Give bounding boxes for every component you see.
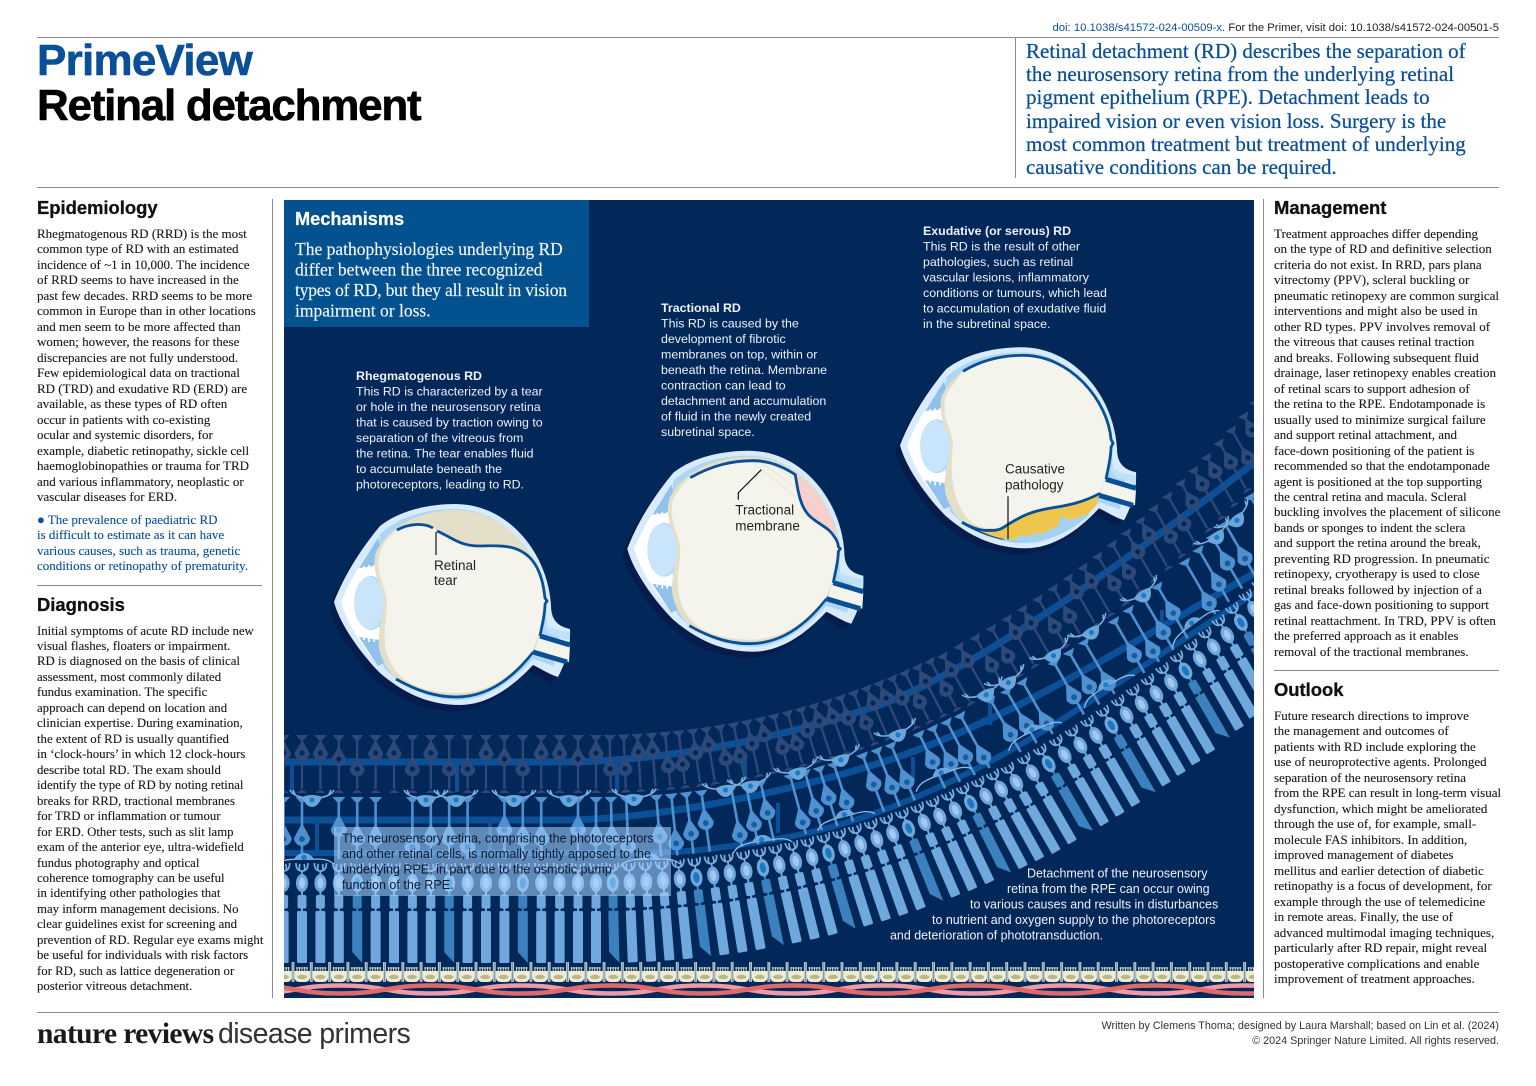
text: management body: usually used to minimize surgical failure [1274,412,1486,427]
label: tractional membrane: membrane [735,519,800,534]
text: epidemiology body: Few epidemiological data on tractional [37,365,240,380]
yellow exudative fluid [976,493,1100,541]
text: rhegmatogenous RD: that is caused by traction owing to [356,416,543,430]
text: diagnosis body: in identifying other pathologies that [37,886,220,900]
heading: Management: Management [1274,197,1386,218]
text: exudative RD: vascular lesions, inflammatory [923,270,1090,284]
label: retinal tear: Retinal [434,558,476,573]
text: outlook body: through the use of, for example, small- [1274,816,1476,831]
text: management body: preventing RD progression. In pneumatic [1274,551,1490,566]
title: PrimeView [37,36,252,85]
text: diagnosis body: visual flashes, floaters or impairment. [37,639,230,653]
eye: exudative RD [895,347,1136,554]
text: epidemiology body: ocular and systemic disorders, for [37,427,213,442]
callout: neurosensory retina [334,827,671,896]
text: epidemiology body [36,226,256,504]
text: outlook body: mellitus and earlier detection of diabetic [1274,863,1484,878]
text: diagnosis body: clear guidelines exist for screening and [37,917,237,931]
text: rhegmatogenous RD: or hole in the neurosensory retina [356,400,541,414]
text: tractional RD: development of fibrotic [661,332,786,346]
doi reference line: doi: 10.1038/s41572-024-00509-x. For the Primer, visit doi: 10.1038/s41572-024-00501-5 [1052,22,1499,34]
eye: tractional RD [622,451,863,658]
text: exudative RD: This RD is the result of other [923,240,1080,254]
text: mechanisms intro: impairment or loss. [295,300,431,320]
intro text: most common treatment but treatment of underlying [1026,132,1466,156]
text: rhegmatogenous RD: to accumulate beneath the [356,462,502,476]
text: outlook body: advanced multimodal imaging techniques, [1274,925,1494,940]
text: management body: and support retinal attachment, and [1274,427,1457,442]
text: management body: the retina to the RPE. Endotamponade is [1274,396,1485,411]
text: diagnosis body: in ‘clock-hours’ in which 12 clock-hours [37,747,245,761]
callout: neurosensory retina: The neurosensory retina, comprising the photoreceptors [342,832,654,846]
heading: Outlook: Outlook [1274,679,1343,700]
text: epidemiology body: common in Europe than in other locations [37,303,256,318]
text: epidemiology body: discrepancies are not fully understood. [37,350,238,365]
callout line: retinal tear [435,532,437,555]
text: management body: criteria do not exist. In RRD, pars plana [1274,257,1482,272]
horizontal cells [274,498,1258,867]
text: exudative RD: Exudative (or serous) RD [923,224,1071,238]
text: diagnosis body: Initial symptoms of acute RD include new [37,624,254,638]
label: causative pathology: Causative [1005,461,1065,476]
text: outlook body: particularly after RD repair, might reveal [1274,940,1487,955]
photoreceptor, bipolar and ganglion cells: flat section [276,735,604,963]
text: rhegmatogenous RD: separation of the vitreous from [356,431,523,445]
neural layer bands [284,458,1260,853]
photoreceptor, bipolar and ganglion cells: curved detached section [602,396,1376,963]
text: epidemiology body: Rhegmatogenous RD (RRD) is the most [37,226,247,241]
text: management body [1274,226,1500,659]
text: management body: the preferred approach as it enables [1274,628,1458,643]
text: epidemiology body: and men seem to be more affected than [37,319,241,334]
text: diagnosis body: fundus photography and optical [37,856,199,870]
text: tractional RD: detachment and accumulation [661,394,826,408]
text: management body: other RD types. PPV involves removal of [1274,319,1490,334]
text: diagnosis body: for ERD. Other tests, such as slit lamp [37,825,234,839]
intro text: pigment epithelium (RPE). Detachment leads to [1026,85,1430,109]
text: management body: and support the retina around the break, [1274,535,1481,550]
text: outlook body: improved management of diabetes [1274,847,1453,862]
text: management body: bands or sponges to indent the sclera [1274,520,1465,535]
text: mechanisms intro: types of RD, but they all result in vision [295,280,567,300]
intro text: impaired vision or even vision loss. Surgery is the [1026,109,1446,133]
text: tractional RD: beneath the retina. Membrane [661,363,827,377]
text: management body: agent is positioned at the top supporting [1274,474,1482,488]
text: rhegmatogenous RD: photoreceptors, leading to RD. [356,478,524,492]
callout: neurosensory retina: and other retinal cells, is normally tightly apposed to the [342,847,651,861]
text: management body: removal of the tractional membranes. [1274,644,1469,659]
callout: paediatric RD: ● The prevalence of paediatric RD [37,512,218,527]
text: diagnosis body [36,624,264,993]
text: tractional RD: contraction can lead to [661,378,786,392]
title: Retinal detachment [37,81,420,130]
text: detachment consequences: to nutrient and oxygen supply to the photoreceptors [932,913,1216,927]
text: rhegmatogenous RD: the retina. The tear enables fluid [356,446,534,460]
text: diagnosis body: for RD, such as lattice degeneration or [37,964,234,978]
text: diagnosis body: the extent of RD is usually quantified [37,732,229,746]
text: diagnosis body: may inform management decisions. No [37,902,239,916]
text: rhegmatogenous RD: Rhegmatogenous RD [356,369,482,383]
box: mechanisms intro [284,200,589,327]
text: epidemiology body: common type of RD with an estimated [37,241,238,256]
text: detachment consequences: and deterioration of phototransduction. [890,928,1103,942]
retinal pigment epithelium [284,960,1254,984]
title [37,36,422,130]
text: epidemiology body: available, as these types of RD often [37,396,227,411]
text: management body: and breaks. Following subsequent fluid [1274,350,1479,365]
intro text: the neurosensory retina from the underlying retinal [1026,62,1454,86]
text: outlook body: Future research directions to improve [1274,708,1469,723]
label: tractional membrane: Tractional [735,503,794,518]
text: detachment consequences: to various causes and results in disturbances [970,898,1218,912]
panel: mechanisms [284,200,1254,998]
text: outlook body: dysfunction, which might be ameliorated [1274,801,1487,816]
text: outlook body [1274,708,1501,986]
text: epidemiology body: example, diabetic retinopathy, sickle cell [37,443,249,458]
text: management body: vitrectomy (PPV), scleral buckling or [1274,272,1469,287]
callout: paediatric RD: conditions or retinopathy of prematurity. [37,558,248,573]
text: outlook body: improvement of treatment approaches. [1274,971,1475,986]
label: retinal tear: tear [434,573,458,588]
text: management body: the central retina and macula. Scleral [1274,489,1467,504]
text: outlook body: retinopathy is a focus of development, for [1274,878,1492,893]
text: diagnosis body: fundus examination. The specific [37,685,207,699]
text: management body: drainage, laser retinopexy enables creation [1274,365,1496,380]
text: exudative RD: conditions or tumours, which lead [923,286,1107,300]
heading: Mechanisms: Mechanisms [295,209,404,229]
label: causative pathology: pathology [1005,477,1064,492]
callout: neurosensory retina: function of the RPE. [342,878,454,892]
text: outlook body: patients with RD include exploring the [1274,739,1476,754]
text: tractional RD: Tractional RD [661,301,741,315]
text: exudative RD: to accumulation of exudative fluid [923,302,1106,316]
text: management body: on the type of RD and definitive selection [1274,241,1492,256]
footer logo: nature reviews disease primers [37,1018,410,1050]
text: outlook body: in remote areas. Finally, the use of [1274,909,1453,924]
text: epidemiology body: occur in patients with co-existing [37,412,210,427]
text: outlook body: from the RPE can result in long-term visual [1274,785,1501,800]
text: management body: buckling involves the placement of silicone [1274,504,1500,519]
text: management body: gas and face-down positioning to support [1274,597,1489,612]
text: epidemiology body: of RRD seems to have increased in the [37,272,239,287]
text: outlook body: molecule FAS inhibitors. In addition, [1274,832,1467,847]
text: management body: the vitreous that causes retinal traction [1274,334,1474,349]
text: diagnosis body: coherence tomography can be useful [37,871,225,885]
text: outlook body: example through the use of telemedicine [1274,894,1485,909]
text: diagnosis body: be useful for individuals with risk factors [37,948,248,962]
text: diagnosis body: breaks for RRD, tractional membranes [37,794,235,808]
text: diagnosis body: identify the type of RD by noting retinal [37,778,244,792]
text: management body: face-down positioning of the patient is [1274,443,1474,458]
text: tractional RD: subretinal space. [661,425,755,439]
callout: neurosensory retina: underlying RPE, in part due to the osmotic pump [342,862,612,876]
text: epidemiology body: and various inflammatory, neoplastic or [37,474,244,488]
text: mechanisms intro: The pathophysiologies underlying RD [295,239,563,259]
intro text [1026,39,1466,179]
text: diagnosis body: for TRD or inflammation or tumour [37,809,221,823]
footer credits: © 2024 Springer Nature Limited. All rights reserved. [1252,1034,1499,1046]
text: outlook body: use of neuroprotective agents. Prolonged [1274,754,1487,769]
retinal cell layers [274,396,1376,963]
text: epidemiology body: incidence of ~1 in 10,000. The incidence [37,257,250,272]
text: tractional RD: membranes on top, within or [661,348,817,362]
callout line: tractional membrane [738,470,761,500]
text: tractional RD: This RD is caused by the [661,316,799,330]
choroid vessels [250,986,1300,994]
heading: Diagnosis: Diagnosis [37,594,125,615]
intro text: Retinal detachment (RD) describes the separation of [1026,39,1466,63]
text: detachment consequences: retina from the RPE can occur owing [1007,882,1210,896]
callout: paediatric RD: is difficult to estimate as it can have [37,527,224,542]
text: outlook body: the management and outcomes of [1274,723,1449,738]
footer credits: Written by Clemens Thoma; designed by Laura Marshall; based on Lin et al. (2024) [1101,1020,1499,1032]
pink subretinal fluid [795,474,837,537]
text: epidemiology body: past few decades. RRD seems to be more [37,288,252,303]
text: exudative RD: pathologies, such as retinal [923,255,1073,269]
text: epidemiology body: women; however, the reasons for these [37,334,239,349]
text: diagnosis body: exam of the anterior eye, ultra-widefield [37,840,244,854]
text: epidemiology body: vascular diseases for ERD. [37,489,177,504]
text: rhegmatogenous RD: This RD is characterized by a tear [356,384,543,398]
text: outlook body: separation of the neurosensory retina [1274,770,1466,785]
text: management body: retinopexy, cryotherapy is used to close [1274,566,1480,581]
text: diagnosis body: assessment, most commonly dilated [37,670,221,684]
text: management body: recommended so that the endotamponade [1274,458,1490,473]
callout: paediatric RD: various causes, such as trauma, genetic [37,543,240,558]
text: tractional RD: of fluid in the newly created [661,410,811,424]
text: outlook body: postoperative complications and enable [1274,956,1479,970]
text: management body: interventions and might also be used in [1274,303,1478,318]
heading: Epidemiology: Epidemiology [37,197,158,218]
text: management body: of retinal scars to support adhesion of [1274,381,1470,396]
callout: paediatric RD [36,512,248,573]
text: exudative RD: in the subretinal space. [923,317,1050,331]
eye: rhegmatogenous RD [329,504,570,711]
text: detachment consequences: Detachment of the neurosensory [1027,866,1208,880]
text: diagnosis body: clinician expertise. During examination, [37,716,243,730]
text: epidemiology body: haemoglobinopathies or trauma for TRD [37,458,249,473]
text: management body: retinal reattachment. In TRD, PPV is often [1274,613,1496,628]
callout line: causative pathology [1007,496,1009,539]
text: management body: retinal breaks followed by injection of a [1274,582,1482,597]
text: epidemiology body: RD (TRD) and exudative RD (ERD) are [37,381,247,396]
text: mechanisms intro: differ between the three recognized [295,260,543,280]
text: diagnosis body: approach can depend on location and [37,701,227,715]
text: management body: pneumatic retinopexy are common surgical [1274,288,1499,303]
text: diagnosis body: describe total RD. The exam should [37,763,221,777]
footer credits [1101,1020,1499,1046]
text: diagnosis body: prevention of RD. Regular eye exams might [37,933,263,947]
text: diagnosis body: posterior vitreous detachment. [37,979,192,993]
text: management body: Treatment approaches differ depending [1274,226,1478,241]
intro text: causative conditions can be required. [1026,155,1337,179]
text: diagnosis body: RD is diagnosed on the basis of clinical [37,654,240,668]
